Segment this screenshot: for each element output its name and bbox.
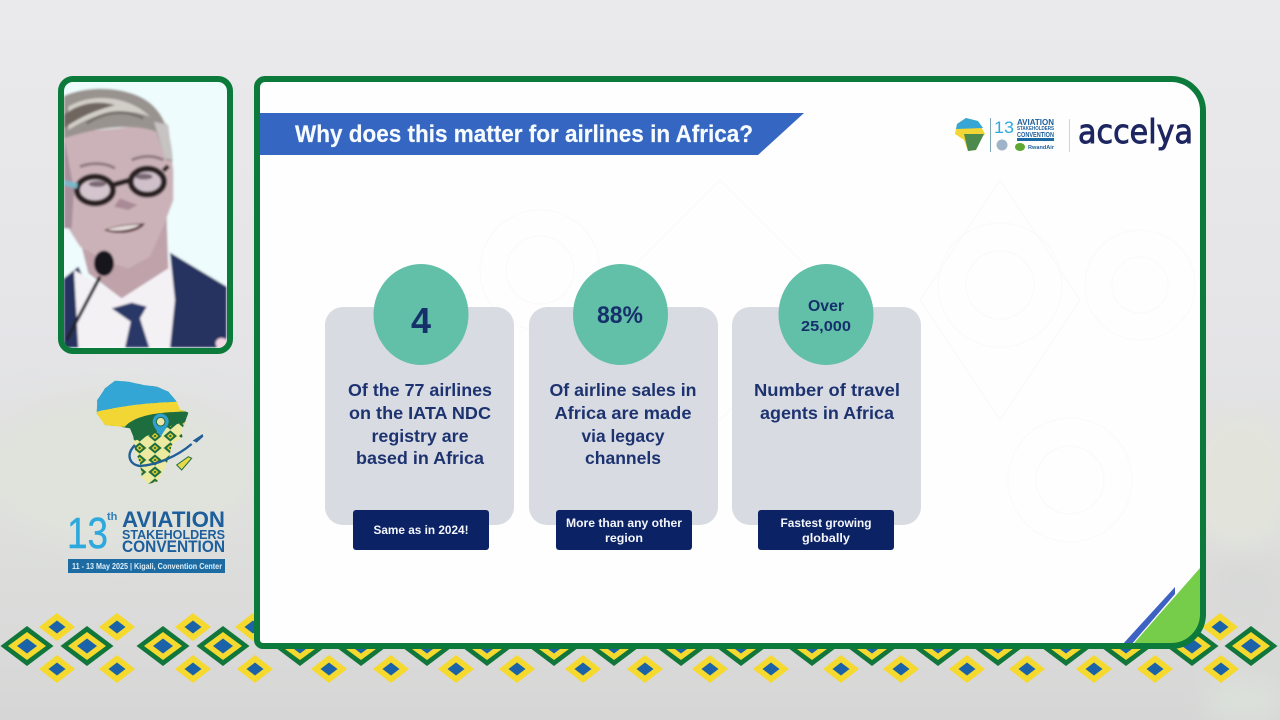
description [550,380,696,468]
stat circle [374,264,468,365]
corner accent: blue stripe [1122,587,1175,645]
note label [758,510,894,550]
logo wordmark: 11 - 13 May 2025 | Kigali, Convention Center [72,561,223,571]
description: on the IATA NDC [349,403,491,423]
speaker video frame [61,79,230,351]
note label: region [605,531,643,545]
card 2: 88% legacy channels [529,264,718,550]
description: via legacy [582,426,665,446]
description: Africa are made [554,403,692,423]
note label: globally [802,531,850,545]
description [348,380,492,468]
description: Of airline sales in [550,380,696,400]
logo wordmark: th [107,511,118,523]
stat circle [778,264,874,365]
logo: convention small: STAKEHOLDERS [1017,126,1054,132]
note label: More than any other [566,516,682,530]
description: agents in Africa [760,403,894,423]
logo: convention small: 13 [994,118,1014,137]
note label [556,510,692,550]
description: registry are [372,426,469,446]
card 1: 4 airlines [325,264,514,550]
logo wordmark: 13 [67,509,108,558]
corner accent: green triangle [1134,568,1200,643]
note label [353,510,489,550]
convention logo left [67,377,225,573]
stat circle: Over [808,298,844,315]
main slide panel [257,79,1206,650]
stat circle: 4 [411,300,431,341]
logo: convention small: CONVENTION [1017,132,1054,139]
title banner [260,113,804,155]
logo wordmark: STAKEHOLDERS [122,527,225,542]
logo wordmark: CONVENTION [122,537,225,556]
logo: accelya: accelya [1078,112,1193,151]
stat circle: 88% [597,302,643,329]
logo: convention small: RwandAir [1028,145,1055,151]
note label: Fastest growing [780,516,872,530]
stat circle [573,264,668,365]
description: Of the 77 airlines [348,380,492,400]
logo wordmark [67,507,225,573]
note label: Same as in 2024! [374,523,468,537]
decorative diamond band [0,613,1278,683]
description: Number of travel [754,380,900,400]
description [754,380,900,423]
logo wordmark: AVIATION [122,507,225,532]
logo: convention small [955,118,1070,152]
title banner: Why does this matter for airlines in Africa? [295,121,753,148]
card 3: travel agents [732,264,921,550]
icon: Africa map with pin and plane [96,380,204,484]
logo: convention small: AVIATION [1017,118,1054,127]
description: channels [585,448,661,468]
stat circle: 25,000 [801,318,851,335]
description: based in Africa [356,448,484,468]
